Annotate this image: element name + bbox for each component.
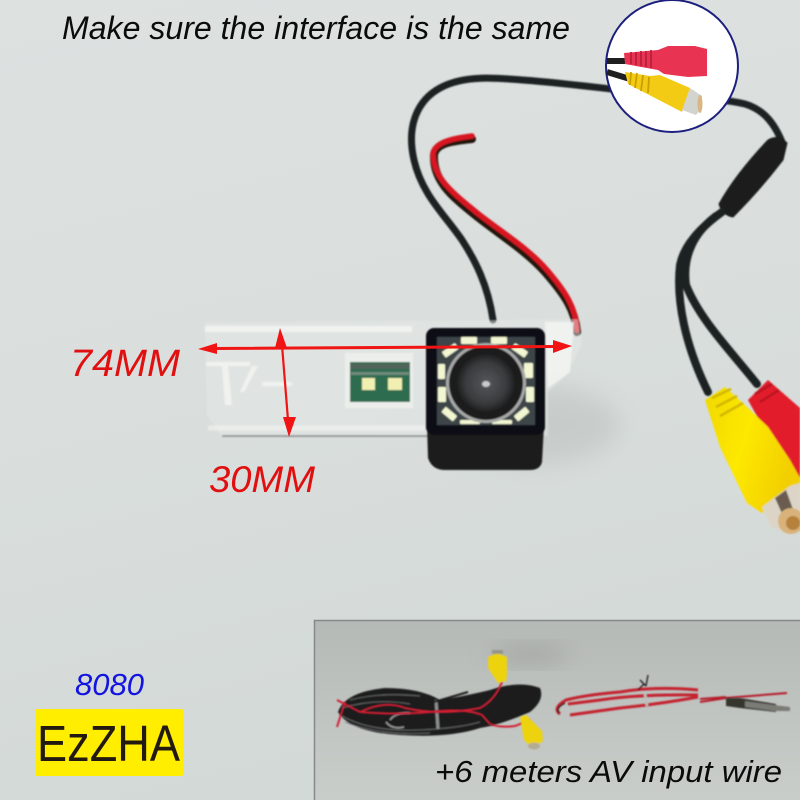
30MM label: 30MM <box>209 459 315 500</box>
LED panel <box>437 337 535 425</box>
interface black cables <box>607 61 630 79</box>
yellow RCA plug <box>705 387 800 534</box>
yellow RCA upper <box>488 650 507 683</box>
license plate bracket <box>205 319 582 437</box>
red interface connector <box>624 46 707 77</box>
LED circuit board <box>345 353 413 408</box>
plug tip <box>778 508 800 534</box>
interface metal tip <box>682 88 702 115</box>
plug metal sleeve <box>762 483 800 534</box>
black split cable to red plug <box>685 216 757 384</box>
30MM arrow <box>275 328 296 437</box>
accessories caption: +6 meters AV input wire <box>435 754 782 789</box>
black AV cable coil <box>338 684 541 736</box>
red wire along coil <box>337 682 530 727</box>
74MM arrow <box>198 340 572 354</box>
camera lower housing <box>427 425 544 470</box>
black video cable <box>412 78 782 320</box>
red power cable coil <box>557 675 787 715</box>
red RCA plug <box>748 380 800 480</box>
yellow interface connector <box>625 72 690 112</box>
inline module <box>719 138 787 217</box>
red power wire <box>434 139 577 332</box>
product photo: camera cables <box>412 78 787 392</box>
shadow streaks <box>490 647 570 663</box>
dimension arrows <box>198 328 572 437</box>
camera front frame <box>426 328 545 435</box>
brand badge: EzZHA <box>37 715 180 772</box>
LED ring <box>438 337 534 424</box>
inset: RCA interface <box>606 0 738 132</box>
74MM label: 74MM <box>70 343 180 385</box>
inset: accessories photo <box>314 620 800 800</box>
DC power plug <box>726 698 790 712</box>
model number: 8080 <box>75 667 144 702</box>
clear bracket body <box>205 319 582 437</box>
camera shadow <box>440 385 620 465</box>
camera <box>426 328 545 470</box>
yellow RCA lower <box>520 715 543 750</box>
camera lens <box>446 343 526 423</box>
bracket edge highlights <box>205 322 574 405</box>
RCA plugs <box>705 380 800 534</box>
title: Make sure the interface is the same <box>62 10 570 46</box>
black split cable to yellow plug <box>679 212 722 392</box>
